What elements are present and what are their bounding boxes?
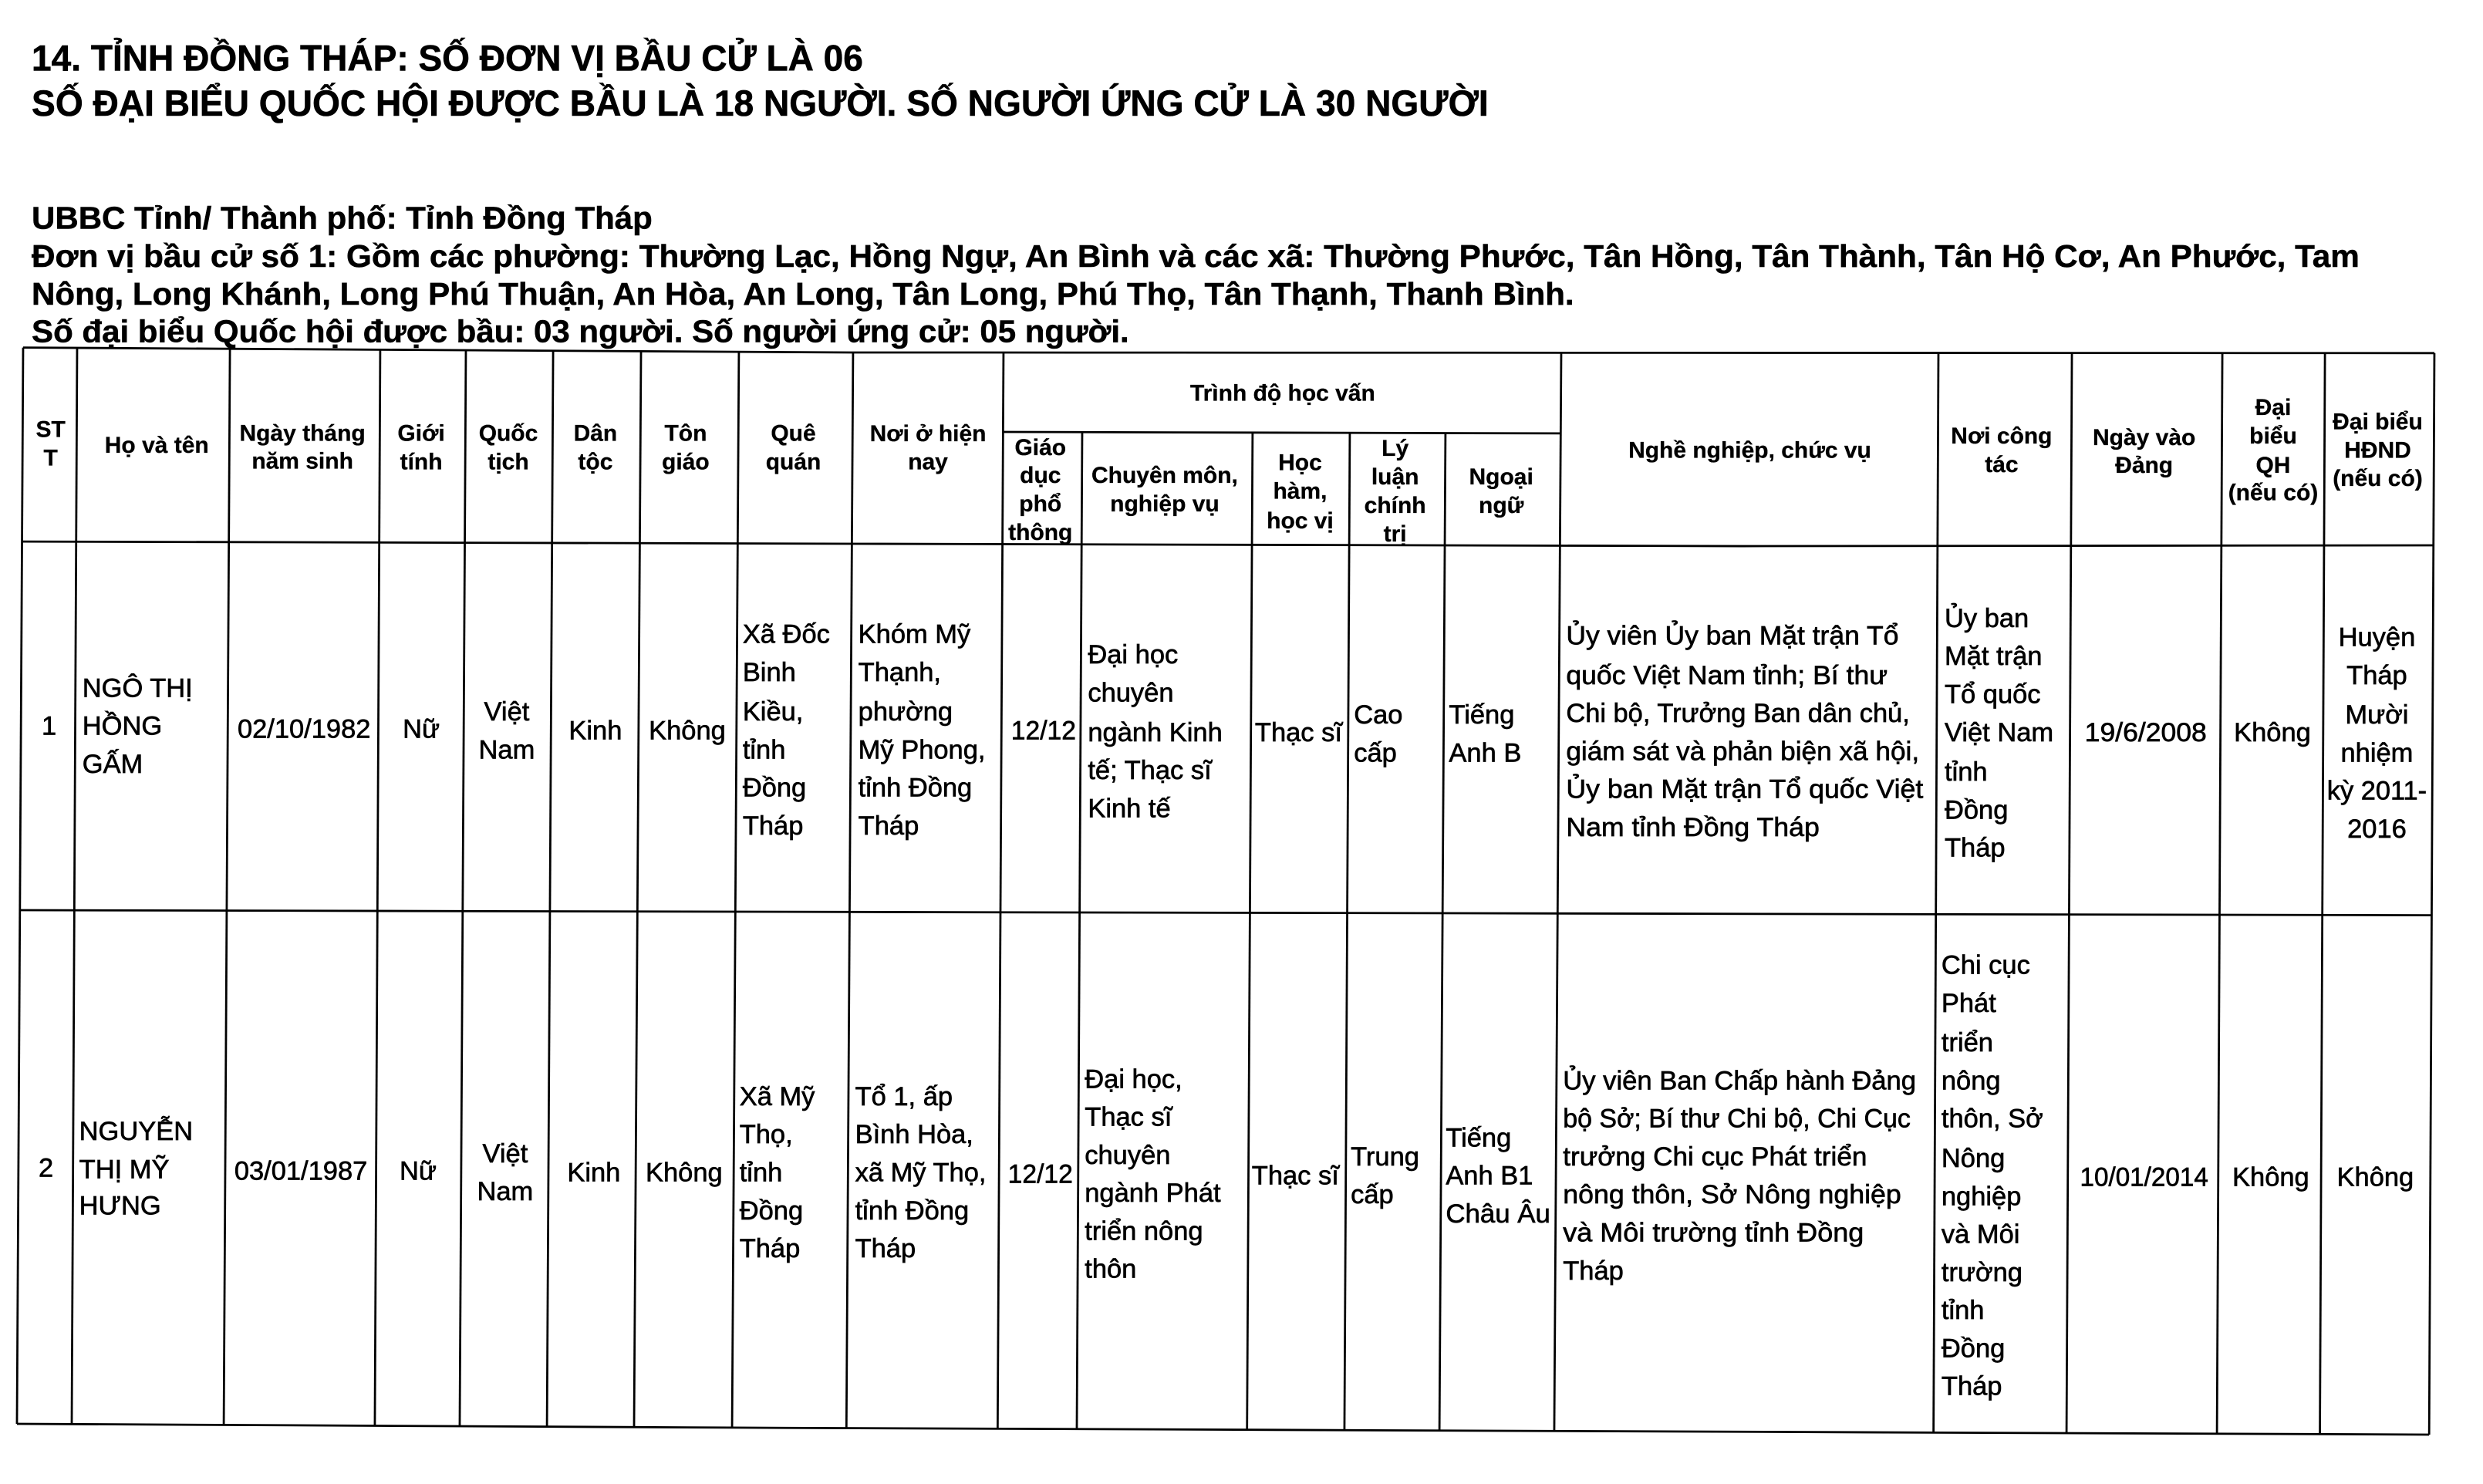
column: date of birth: Ngày tháng — [240, 421, 366, 447]
column: ethnicity: tộc — [578, 450, 612, 475]
occupation: Ủy viên Ban Chấp hành Đảng — [1563, 1064, 1916, 1095]
workplace: Việt Nam — [1945, 718, 2053, 747]
column: political theory — [1365, 436, 1426, 547]
name: THỊ MỸ — [79, 1154, 169, 1184]
column: specialty: nghiệp vụ — [1110, 491, 1220, 517]
column: political theory: luận — [1371, 464, 1419, 490]
people's council delegate: Mười — [2345, 700, 2408, 730]
column: STT: T — [44, 446, 58, 471]
political theory: Cao — [1354, 700, 1402, 730]
column: party entry date: Đảng — [2115, 453, 2173, 478]
column: occupation: Nghề nghiệp, chức vụ — [1628, 437, 1871, 463]
residence: xã Mỹ Thọ, — [855, 1158, 986, 1187]
title — [32, 36, 1489, 124]
hometown: Xã Đốc — [743, 619, 830, 649]
ethnicity: Kinh — [568, 717, 622, 746]
political theory: cấp — [1351, 1180, 1394, 1209]
nationality — [479, 697, 535, 764]
column: general education — [1008, 435, 1072, 545]
residence: Mỹ Phong, — [859, 735, 985, 764]
occupation: Ủy viên Ủy ban Mặt trận Tổ — [1566, 620, 1898, 651]
column: people's council delegate — [2333, 409, 2423, 491]
column: general education: phổ — [1019, 491, 1061, 517]
column: political theory: trị — [1384, 521, 1407, 547]
number: 1 — [42, 712, 56, 741]
name: HƯNG — [79, 1192, 161, 1221]
religion: Không — [646, 1158, 723, 1187]
hometown: Tháp — [740, 1234, 800, 1263]
column: general education: dục — [1020, 463, 1061, 488]
column: nationality: Quốc — [479, 421, 538, 447]
column: residence — [870, 421, 986, 475]
political theory: Trung — [1351, 1142, 1419, 1172]
table header — [36, 380, 2423, 547]
occupation: Nam tỉnh Đồng Tháp — [1566, 813, 1820, 842]
column: residence: Nơi ở hiện — [870, 421, 986, 447]
residence: Thạnh, — [859, 658, 941, 687]
column: STT: ST — [36, 417, 66, 443]
residence: phường — [859, 697, 953, 727]
column: people's council delegate: (nếu có) — [2333, 466, 2423, 491]
electoral unit information: UBBC Tỉnh/ Thành phố: Tỉnh Đồng Tháp — [32, 201, 653, 236]
column: STT — [36, 417, 66, 471]
foreign language: Tiếng — [1449, 700, 1514, 730]
row 2: Nguyễn Thị Mỹ Hưng — [39, 951, 2414, 1401]
gender: Nữ — [403, 715, 440, 744]
nationality: Nam — [477, 1177, 533, 1206]
column: general education: Giáo — [1014, 435, 1066, 460]
occupation: quốc Việt Nam tỉnh; Bí thư — [1566, 661, 1888, 690]
workplace: Mặt trận — [1945, 642, 2042, 671]
hometown: Đồng — [743, 774, 806, 803]
people's council delegate: Huyện — [2339, 623, 2415, 653]
column: hometown — [766, 421, 821, 475]
party entry date: 10/01/2014 — [2080, 1163, 2208, 1192]
foreign language: Tiếng — [1446, 1123, 1511, 1152]
workplace: triển — [1942, 1028, 1993, 1057]
residence: tỉnh Đồng — [859, 774, 972, 803]
workplace: Chi cục — [1942, 951, 2030, 980]
column: workplace: Nơi công — [1951, 423, 2052, 449]
table grid — [17, 348, 2434, 1435]
column: people's council delegate: HĐND — [2344, 437, 2411, 463]
hometown: Xã Mỹ — [740, 1082, 815, 1111]
column: foreign language: Ngoại — [1469, 464, 1533, 490]
specialty: ngành Phát — [1085, 1179, 1221, 1208]
occupation: Ủy ban Mặt trận Tổ quốc Việt — [1566, 774, 1924, 804]
electoral unit information — [32, 201, 2360, 349]
specialty: Thạc sĩ — [1085, 1103, 1173, 1132]
residence — [859, 619, 985, 841]
column: party entry date: Ngày vào — [2093, 425, 2195, 450]
workplace: Tháp — [1942, 1372, 2002, 1401]
column: ethnicity — [574, 421, 617, 475]
foreign language — [1446, 1123, 1550, 1229]
workplace: Nông — [1942, 1144, 2005, 1173]
column: academic title: Học — [1278, 450, 1322, 476]
workplace: trường — [1942, 1258, 2022, 1287]
column: people's council delegate: Đại biểu — [2333, 409, 2423, 434]
column: date of birth — [240, 421, 366, 474]
group heading: education: Trình độ học vấn — [1190, 380, 1375, 406]
workplace — [1942, 951, 2043, 1401]
column: religion — [662, 421, 710, 475]
title: SỐ ĐẠI BIỂU QUỐC HỘI ĐƯỢC BẦU LÀ 18 NGƯỜI. SỐ NGƯỜI ỨNG CỬ LÀ 30 NGƯỜI — [32, 82, 1489, 124]
column: religion: giáo — [662, 450, 710, 475]
electoral unit information: Đơn vị bầu cử số 1: Gồm các phường: Thường Lạc, Hồng Ngự, An Bình và các xã: Thường Phước, Tân Hồng, Tân Thành, Tân Hộ Cơ, An Phước, Tam — [32, 238, 2360, 274]
specialty: Đại học — [1088, 640, 1178, 669]
electoral unit information: Nông, Long Khánh, Long Phú Thuận, An Hòa, An Long, Tân Long, Phú Thọ, Tân Thạnh, Thanh Bình. — [32, 276, 1574, 312]
specialty: chuyên — [1085, 1141, 1170, 1170]
column: political theory: Lý — [1382, 436, 1408, 461]
title: 14. TỈNH ĐỒNG THÁP: SỐ ĐƠN VỊ BẦU CỬ LÀ 06 — [32, 36, 863, 79]
hometown: Tháp — [743, 811, 803, 841]
column: political theory: chính — [1365, 493, 1426, 518]
foreign language: Châu Âu — [1446, 1199, 1550, 1229]
political theory: cấp — [1354, 738, 1397, 767]
column: date of birth: năm sinh — [251, 449, 353, 474]
specialty: tế; Thạc sĩ — [1088, 756, 1213, 785]
hometown: Binh — [743, 658, 796, 687]
occupation: trưởng Chi cục Phát triển — [1563, 1142, 1867, 1172]
hometown — [740, 1082, 815, 1263]
column: general education: thông — [1008, 520, 1072, 545]
gender: Nữ — [400, 1156, 437, 1186]
people's council delegate: Tháp — [2346, 661, 2407, 690]
general education: 12/12 — [1011, 717, 1076, 746]
workplace: nghiệp — [1942, 1182, 2021, 1211]
column: nationality — [479, 421, 538, 475]
nationality: Việt — [484, 697, 530, 727]
workplace: Phát — [1942, 989, 1996, 1018]
specialty: ngành Kinh — [1088, 718, 1223, 747]
column: academic title — [1267, 450, 1334, 534]
occupation: giám sát và phản biện xã hội, — [1566, 737, 1919, 766]
column: national assembly delegate: Đại — [2255, 395, 2291, 420]
nationality — [477, 1139, 533, 1206]
occupation: bộ Sở; Bí thư Chi bộ, Chi Cục — [1563, 1105, 1911, 1134]
workplace: Tháp — [1945, 834, 2006, 863]
residence — [855, 1082, 986, 1263]
general education: 12/12 — [1008, 1160, 1073, 1189]
nationality: Nam — [479, 735, 535, 764]
date of birth: 03/01/1987 — [234, 1156, 367, 1186]
row 1: Ngô Thị Hồng Gấm — [42, 602, 2427, 863]
people's council delegate — [2327, 623, 2427, 844]
workplace — [1945, 602, 2053, 863]
column: academic title: học vị — [1267, 508, 1334, 534]
workplace: thôn, Sở — [1942, 1105, 2043, 1134]
column: foreign language: ngữ — [1479, 493, 1524, 518]
religion: Không — [649, 717, 726, 746]
date of birth: 02/10/1982 — [238, 715, 370, 744]
column: national assembly delegate: biểu — [2249, 423, 2297, 449]
electoral unit information: Số đại biểu Quốc hội được bầu: 03 người. Số người ứng cử: 05 người. — [32, 313, 1129, 349]
specialty: triển nông — [1085, 1216, 1203, 1246]
political theory — [1354, 700, 1402, 767]
workplace: tỉnh — [1945, 757, 1988, 787]
workplace: Ủy ban — [1945, 602, 2029, 633]
specialty: Đại học, — [1085, 1064, 1182, 1094]
name: HỒNG — [83, 710, 162, 741]
column: name: Họ và tên — [105, 433, 209, 458]
specialty: chuyên — [1088, 678, 1174, 707]
column: nationality: tịch — [487, 450, 529, 475]
column: residence: nay — [908, 450, 948, 475]
column: ethnicity: Dân — [574, 421, 617, 447]
column: gender: tính — [400, 450, 443, 475]
column: national assembly delegate: QH — [2256, 453, 2290, 478]
people's council delegate: kỳ 2011- — [2327, 777, 2427, 806]
column: gender — [397, 421, 445, 475]
column: gender: Giới — [397, 421, 445, 447]
column: workplace: tác — [1985, 452, 2019, 477]
workplace: Đồng — [1945, 795, 2008, 825]
party entry date: 19/6/2008 — [2085, 718, 2207, 747]
residence: Tháp — [855, 1234, 916, 1263]
name — [79, 1115, 193, 1221]
occupation — [1566, 620, 1924, 842]
column: academic title: hàm, — [1273, 479, 1327, 504]
column: hometown: Quê — [771, 421, 816, 447]
hometown: tỉnh — [743, 735, 785, 764]
foreign language: Anh B1 — [1446, 1162, 1533, 1191]
occupation: Chi bộ, Trưởng Ban dân chủ, — [1566, 699, 1910, 728]
academic title: Thạc sĩ — [1255, 718, 1343, 747]
column: specialty — [1091, 463, 1238, 517]
occupation: nông thôn, Sở Nông nghiệp — [1563, 1180, 1901, 1209]
name: GẤM — [83, 748, 143, 779]
column: religion: Tôn — [664, 421, 707, 447]
residence: Khóm Mỹ — [859, 619, 971, 649]
specialty — [1088, 640, 1223, 823]
column: workplace — [1951, 423, 2052, 477]
residence: Bình Hòa, — [855, 1120, 973, 1149]
hometown — [743, 619, 830, 841]
candidate table — [17, 348, 2434, 1435]
national assembly delegate: Không — [2234, 718, 2311, 747]
ethnicity: Kinh — [567, 1158, 620, 1187]
column: party entry date — [2093, 425, 2195, 478]
column: national assembly delegate — [2228, 395, 2318, 506]
name: NGÔ THỊ — [83, 673, 193, 703]
hometown: tỉnh — [740, 1158, 782, 1187]
workplace: Tổ quốc — [1945, 680, 2041, 709]
name: NGUYỄN — [79, 1115, 193, 1146]
occupation: và Môi trường tỉnh Đồng — [1563, 1218, 1864, 1247]
hometown: Thọ, — [740, 1120, 793, 1149]
political theory — [1351, 1142, 1419, 1209]
academic title: Thạc sĩ — [1252, 1162, 1340, 1191]
occupation — [1563, 1064, 1916, 1286]
workplace: tỉnh — [1942, 1296, 1984, 1325]
column: hometown: quán — [766, 450, 821, 475]
people's council delegate: nhiệm — [2341, 738, 2413, 767]
foreign language — [1449, 700, 1521, 767]
residence: Tổ 1, ấp — [855, 1082, 953, 1111]
national assembly delegate: Không — [2232, 1163, 2309, 1192]
specialty: thôn — [1085, 1255, 1136, 1284]
workplace: Đồng — [1942, 1334, 2005, 1363]
column: national assembly delegate: (nếu có) — [2228, 481, 2318, 506]
column: specialty: Chuyên môn, — [1091, 463, 1238, 488]
residence: Tháp — [859, 811, 919, 841]
occupation: Tháp — [1563, 1256, 1624, 1286]
residence: tỉnh Đồng — [855, 1196, 969, 1226]
number: 2 — [39, 1153, 53, 1182]
hometown: Kiều, — [743, 697, 803, 727]
foreign language: Anh B — [1449, 738, 1521, 767]
workplace: nông — [1942, 1066, 2001, 1095]
people's council delegate: Không — [2337, 1163, 2414, 1192]
workplace: và Môi — [1942, 1220, 2019, 1250]
hometown: Đồng — [740, 1196, 803, 1226]
name — [83, 673, 193, 779]
specialty: Kinh tế — [1088, 794, 1171, 823]
column: foreign language — [1469, 464, 1533, 518]
specialty — [1085, 1064, 1221, 1284]
people's council delegate: 2016 — [2347, 815, 2407, 844]
nationality: Việt — [482, 1139, 528, 1169]
